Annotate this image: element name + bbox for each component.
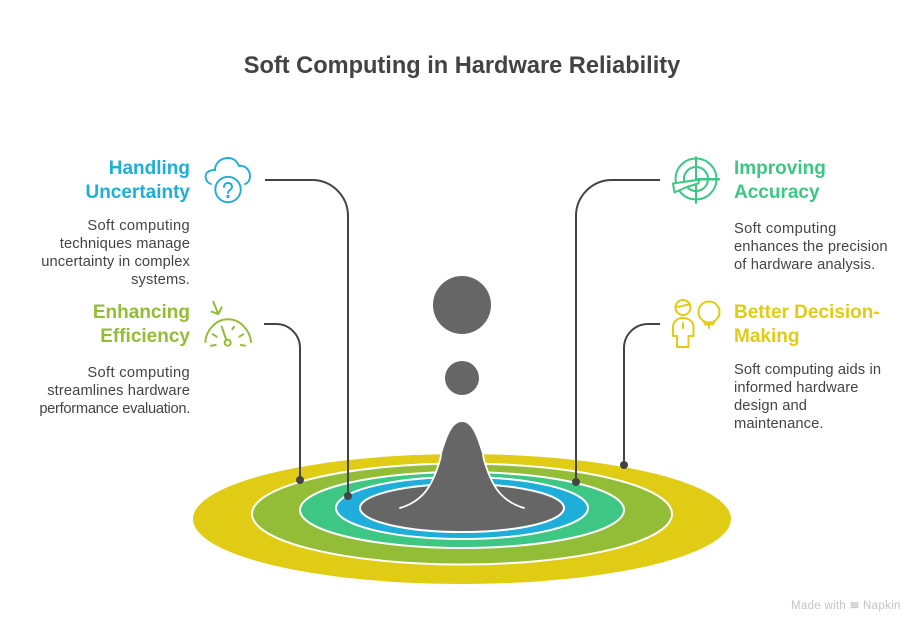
- heading: handling uncertainty: Handling: [109, 158, 190, 179]
- text: improving accuracy: of hardware analysis.: [734, 257, 875, 273]
- text: better decision-making: [734, 362, 881, 432]
- heading: enhancing efficiency: Efficiency: [100, 326, 190, 347]
- heading: enhancing efficiency: Enhancing: [93, 302, 190, 323]
- text: enhancing efficiency: streamlines hardware: [47, 383, 190, 399]
- text: improving accuracy: enhances the precision: [734, 239, 888, 255]
- heading: improving accuracy: [734, 158, 826, 203]
- text: enhancing efficiency: performance evaluation.: [39, 401, 190, 417]
- heading: better decision-making: Better Decision-: [734, 302, 880, 323]
- text: better decision-making: maintenance.: [734, 416, 824, 432]
- icon: cloud with question mark: [206, 158, 250, 202]
- ring: teal green: [300, 472, 624, 548]
- heading: better decision-making: Making: [734, 326, 799, 347]
- connector: improving accuracy: [572, 180, 660, 486]
- ring: olive green: [252, 464, 672, 564]
- text: improving accuracy: [734, 221, 888, 273]
- heading: handling uncertainty: [85, 158, 190, 203]
- heading: better decision-making: [734, 302, 880, 347]
- sphere: small: [445, 361, 479, 395]
- text: improving accuracy: Soft computing: [734, 221, 837, 237]
- centre: gray disc: [360, 484, 564, 532]
- icon: person and light bulb: [673, 300, 720, 347]
- heading: improving accuracy: Accuracy: [734, 182, 820, 203]
- connector: better decision-making: [620, 324, 660, 469]
- watermark: Made with ≋ Napkin: [791, 600, 901, 612]
- icon: target with hand: [673, 157, 719, 203]
- text: handling uncertainty: techniques manage: [60, 236, 190, 252]
- text: handling uncertainty: systems.: [131, 272, 190, 288]
- title: Soft Computing in Hardware Reliability: [244, 53, 680, 79]
- text: handling uncertainty: Soft computing: [87, 218, 190, 234]
- text: better decision-making: informed hardware: [734, 380, 858, 396]
- text: enhancing efficiency: [39, 365, 190, 417]
- heading: handling uncertainty: Uncertainty: [85, 182, 190, 203]
- peak: [400, 422, 524, 508]
- connector: enhancing efficiency: [264, 324, 304, 484]
- connector: handling uncertainty: [265, 180, 352, 500]
- text: better decision-making: Soft computing aids in: [734, 362, 881, 378]
- ring: blue: [336, 477, 588, 539]
- text: better decision-making: design and: [734, 398, 807, 414]
- icon: speedometer with arrow: [205, 302, 251, 346]
- ring: yellow: [193, 454, 731, 584]
- text: handling uncertainty: [41, 218, 190, 288]
- heading: enhancing efficiency: [93, 302, 190, 347]
- text: handling uncertainty: uncertainty in complex: [41, 254, 190, 270]
- heading: improving accuracy: Improving: [734, 158, 826, 179]
- sphere: large: [433, 276, 491, 334]
- peak outline: [400, 455, 524, 508]
- text: enhancing efficiency: Soft computing: [87, 365, 190, 381]
